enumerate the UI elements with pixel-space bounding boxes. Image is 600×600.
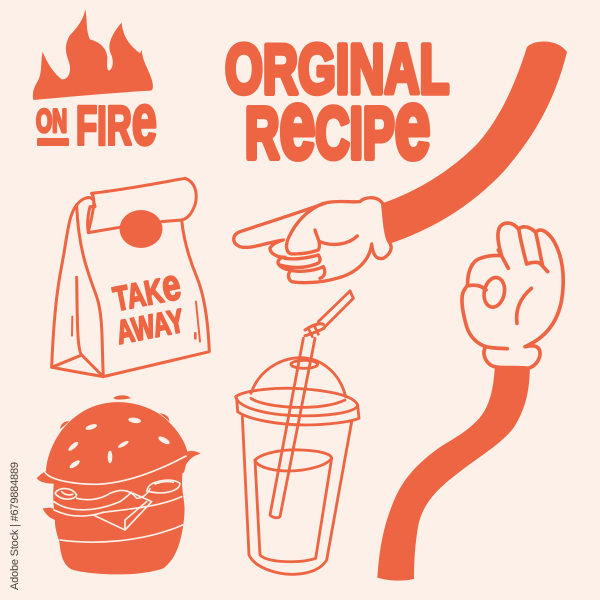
logo text: on fire (36, 80, 157, 160)
sticker on bag (120, 210, 162, 248)
icon: burger (37, 395, 201, 574)
icon: cup with straw (236, 291, 359, 574)
cup body (242, 417, 352, 574)
heading: orginal recipe: ORGINAL (225, 29, 449, 108)
sesame seeds (67, 417, 171, 470)
underline bar (37, 138, 69, 146)
dome lid (251, 358, 346, 397)
liquid surface (255, 450, 332, 471)
top bun (37, 395, 201, 488)
straw (318, 291, 353, 328)
icon: pointing hand (234, 198, 391, 283)
credit: vertical stock id: Adobe Stock | #679884889 (9, 462, 21, 590)
lower arm (377, 365, 530, 581)
bag label: take away: TAKe (109, 260, 185, 321)
icon: paper bag (52, 178, 209, 377)
icon: ok hand with arm (377, 223, 563, 581)
upper arm (383, 42, 567, 244)
bag label: take away (109, 260, 187, 352)
logo text: on fire: ON (36, 104, 67, 139)
heading: orginal recipe: ReCIPe (245, 69, 430, 179)
logo text: on fire: FIRe (76, 80, 157, 160)
burger detail lines (45, 456, 186, 542)
bag label: take away: AWAY (114, 303, 187, 352)
ok glove (462, 223, 563, 368)
icon: flame (33, 9, 153, 100)
bottom layers and bun (43, 468, 185, 574)
heading: orginal recipe (225, 29, 449, 179)
lid rim (236, 388, 358, 416)
